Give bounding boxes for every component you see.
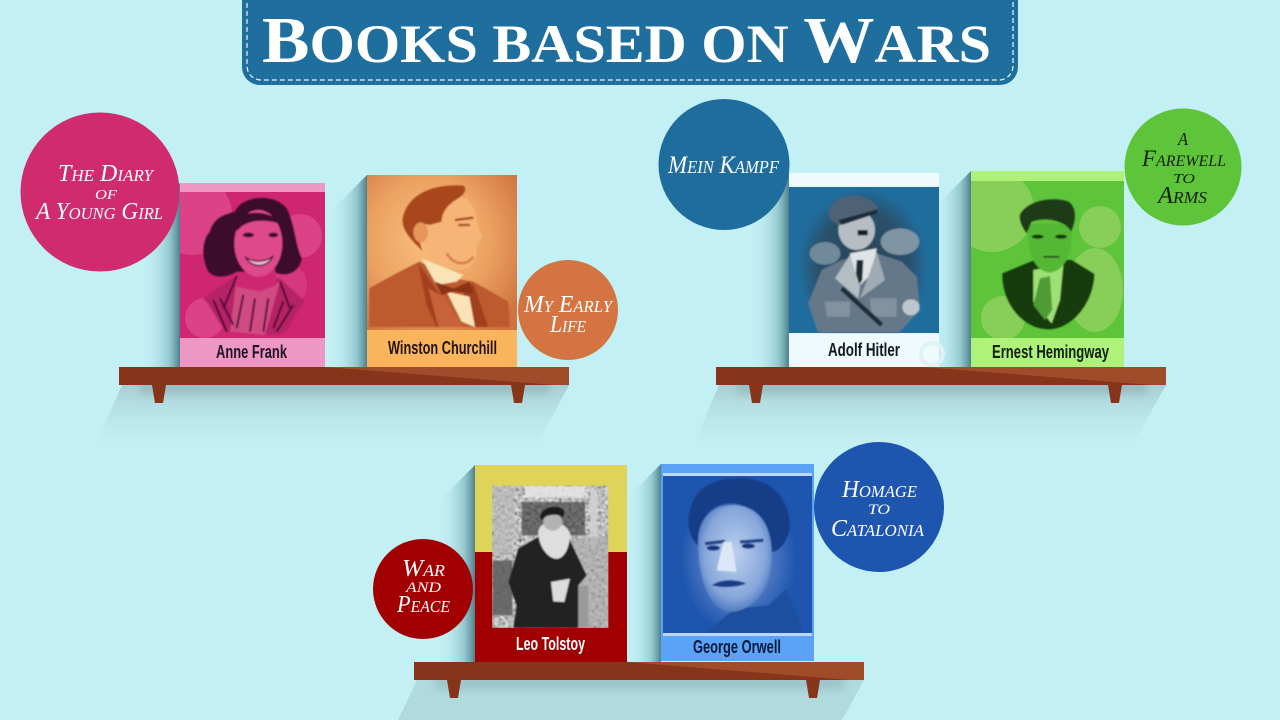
label: Winston Churchill: Winston Churchill	[388, 338, 497, 358]
circle: The Diary of a Young Girl: The Diary	[58, 161, 155, 187]
label: Anne Frank: Anne Frank	[216, 342, 288, 362]
label: George Orwell: George Orwell	[693, 637, 781, 657]
book: George Orwell	[661, 464, 814, 661]
circle: War and Peace: Peace	[396, 592, 451, 618]
circle: A Farewell to Arms: Farewell	[1141, 146, 1226, 171]
circle: Mein Kampf: Mein Kampf	[667, 152, 780, 179]
label: Leo Tolstoy: Leo Tolstoy	[516, 634, 585, 654]
shelf 2 cast shadow	[688, 385, 1166, 458]
circle: A Farewell to Arms: Arms	[1156, 183, 1207, 209]
book shadows	[435, 465, 475, 662]
circle: A Farewell to Arms	[1124, 108, 1242, 226]
circle: Mein Kampf	[658, 99, 790, 230]
portrait: Adolf Hitler	[802, 192, 925, 334]
book: Adolf Hitler	[789, 173, 943, 367]
circle: A Farewell to Arms: A	[1177, 129, 1189, 149]
shelf 2	[716, 367, 1166, 403]
circle: A Farewell to Arms: to	[1173, 166, 1195, 188]
shelf 1 group	[20, 112, 618, 458]
label: Ernest Hemingway: Ernest Hemingway	[992, 342, 1109, 362]
shelf 2 group	[658, 99, 1242, 458]
circle: My Early Life: My Early	[523, 292, 614, 318]
book shadows	[140, 183, 180, 367]
circle: Homage to Catalonia: to	[868, 495, 890, 519]
portrait: Ernest Hemingway	[1002, 199, 1094, 329]
book shadows	[749, 173, 789, 367]
portrait: George Orwell	[680, 478, 803, 634]
shelf 1	[119, 367, 569, 403]
circle: Homage to Catalonia	[814, 442, 944, 572]
circle: The Diary of a Young Girl	[20, 112, 180, 272]
circle: My Early Life: Life	[549, 312, 587, 338]
circle: War and Peace: and	[405, 573, 441, 597]
circle: My Early Life	[518, 260, 618, 360]
book: Winston Churchill	[367, 175, 517, 367]
shelf legs	[152, 385, 166, 403]
title text: BOOKS BASED ON WARS	[262, 4, 991, 77]
book: Leo Tolstoy	[475, 465, 627, 662]
shelf 3	[414, 662, 864, 698]
shelf 3 group	[373, 442, 944, 720]
shelf 1 cast shadow	[90, 385, 569, 458]
portrait: Leo Tolstoy	[492, 486, 608, 628]
circle: Homage to Catalonia: Catalonia	[831, 516, 925, 542]
circle: War and Peace: War	[402, 556, 446, 582]
book: Ernest Hemingway	[971, 171, 1124, 367]
circle: The Diary of a Young Girl: A Young Girl	[34, 199, 163, 225]
shelf 3 cast shadow	[398, 680, 864, 720]
portrait: Winston Churchill	[369, 185, 510, 327]
circle: The Diary of a Young Girl: of	[95, 182, 118, 204]
label: Adolf Hitler: Adolf Hitler	[828, 340, 900, 360]
shelf legs	[447, 680, 461, 698]
circle: Homage to Catalonia: Homage	[841, 477, 918, 503]
title banner	[242, 0, 1018, 85]
book: Anne Frank	[180, 183, 325, 367]
circle: War and Peace	[373, 539, 473, 639]
shelf legs	[749, 385, 763, 403]
portrait: Anne Frank	[203, 198, 305, 335]
